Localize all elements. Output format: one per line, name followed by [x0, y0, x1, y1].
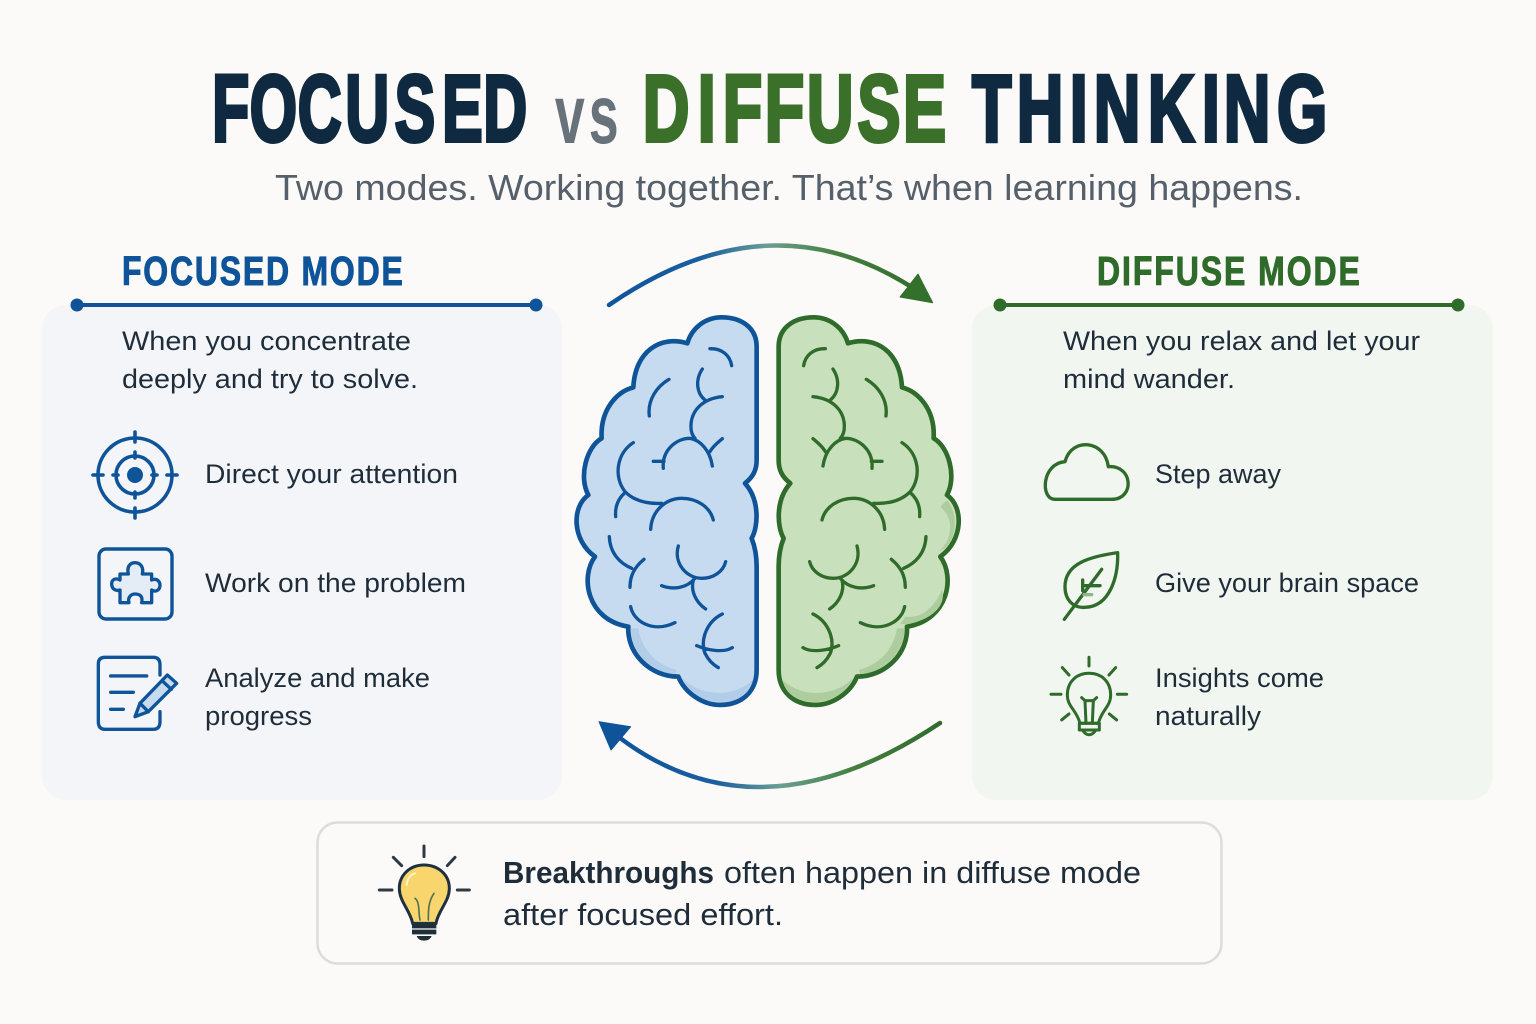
callout text: after focused effort. [503, 897, 783, 932]
label: analyze and make progress: progress [205, 701, 312, 731]
label: step away: Step away [1155, 459, 1281, 489]
heading rule [994, 298, 1464, 312]
label: analyze and make progress [205, 663, 430, 731]
callout text: often happen in diffuse mode [724, 855, 1141, 890]
title: DIFFUSE [643, 56, 946, 162]
brain illustration [577, 317, 959, 705]
arrow: diffuse to focused [599, 722, 940, 787]
description: deeply and try to solve. [122, 364, 418, 394]
title: vs [555, 67, 619, 161]
panel: focused mode [42, 248, 562, 800]
arrow: focused to diffuse [609, 245, 933, 305]
heading: diffuse mode: DIFFUSE MODE [1097, 248, 1360, 294]
subtitle: Two modes. Working together. That’s when learning happens. [275, 167, 1303, 208]
label: insights come naturally [1155, 663, 1324, 731]
label: work on the problem: Work on the problem [205, 568, 466, 598]
icon: cloud [1045, 445, 1128, 499]
description [122, 326, 418, 394]
icon: notepad and pencil [98, 657, 177, 729]
icon: light bulb outline [1051, 657, 1127, 735]
heading: focused mode: FOCUSED MODE [122, 248, 403, 294]
label: give your brain space: Give your brain space [1155, 568, 1419, 598]
icon: target [93, 432, 177, 518]
description: When you relax and let your [1063, 326, 1420, 356]
label: analyze and make progress: Analyze and make [205, 663, 430, 693]
title: THINKING [972, 56, 1327, 162]
title: FOCUSED [212, 55, 527, 161]
icon: puzzle [99, 549, 172, 619]
description [1063, 326, 1420, 394]
description: When you concentrate [122, 326, 411, 356]
icon: leaf [1064, 553, 1118, 619]
label: direct your attention: Direct your attention [205, 459, 458, 489]
title [212, 55, 1327, 162]
callout: breakthroughs [318, 822, 1222, 964]
callout text [503, 855, 1141, 932]
label: insights come naturally: Insights come [1155, 663, 1324, 693]
left hemisphere [577, 317, 757, 705]
right hemisphere [779, 317, 959, 705]
callout text: Breakthroughs [503, 855, 714, 890]
description: mind wander. [1063, 364, 1235, 394]
heading rule [70, 298, 542, 312]
panel: diffuse mode [972, 248, 1493, 800]
label: insights come naturally: naturally [1155, 701, 1262, 731]
icon: yellow light bulb [379, 846, 469, 941]
